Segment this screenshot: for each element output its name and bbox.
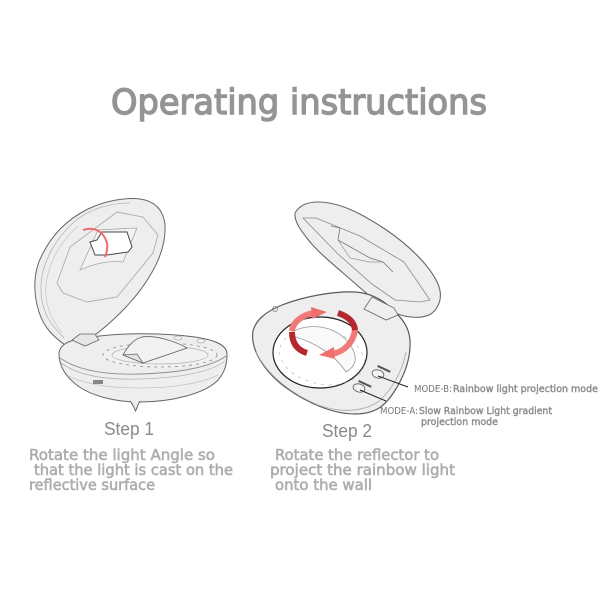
step 2 label: Step 2 <box>322 421 372 441</box>
base buttons <box>174 336 182 340</box>
illustration: step 2 device <box>253 202 440 414</box>
hinge <box>364 297 398 320</box>
step 1 label: Step 1 <box>104 419 154 439</box>
step 1 description: reflective surface <box>29 476 155 494</box>
reflector <box>292 327 355 372</box>
mode A button <box>352 383 366 393</box>
step 2 description: onto the wall <box>275 476 372 494</box>
mode B tiny label <box>377 365 391 373</box>
power icon <box>272 306 278 312</box>
step 2 description: Rotate the reflector to <box>275 446 439 464</box>
reflector <box>123 337 187 363</box>
mode A callout <box>380 406 552 428</box>
device base <box>253 292 410 414</box>
mode A tiny label <box>358 380 372 388</box>
step 1 description <box>29 446 233 494</box>
device base <box>59 334 227 411</box>
device lid open <box>295 202 440 317</box>
mode B button <box>371 369 385 379</box>
foot <box>130 401 140 411</box>
mode B callout: MODE-B: <box>414 384 452 395</box>
USB port <box>93 380 103 384</box>
hinge <box>72 334 99 346</box>
LED ring <box>103 343 217 367</box>
reflective light panel <box>90 232 132 255</box>
step 1 description: that the light is cast on the <box>34 461 233 479</box>
red rotation arrow <box>83 229 107 257</box>
red rotation arrows <box>292 307 355 359</box>
step 2 description: project the rainbow light <box>270 461 455 479</box>
step 1 description: Rotate the light Angle so <box>29 446 215 464</box>
title: Operating instructions <box>111 83 487 123</box>
mode A callout: projection mode <box>421 417 498 428</box>
step 2 description <box>270 446 455 494</box>
mode A callout: Slow Rainbow Light gradient <box>419 406 552 417</box>
device lid open <box>35 198 165 345</box>
leader line: mode A <box>360 390 386 401</box>
illustration: step 1 device <box>35 198 227 411</box>
mode A callout: MODE-A: <box>380 406 418 417</box>
white reflector disc <box>273 317 367 388</box>
leader line: mode B <box>378 376 408 387</box>
